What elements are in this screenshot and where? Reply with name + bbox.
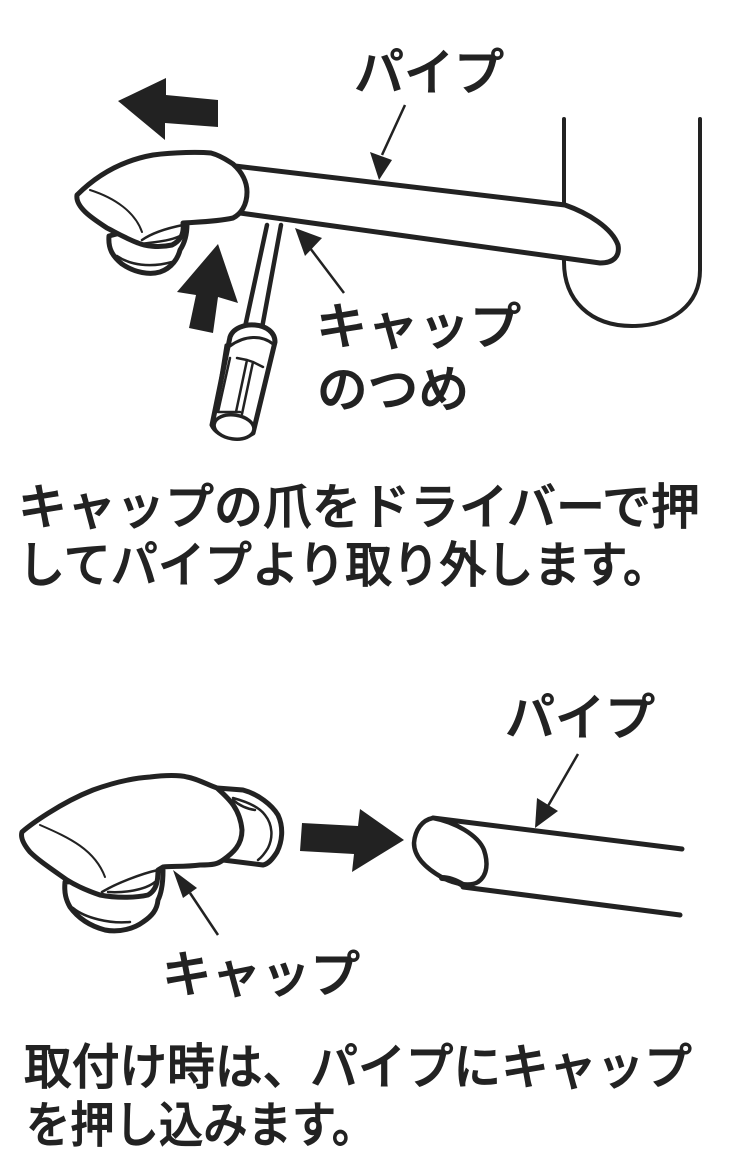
icon: cap	[22, 776, 282, 931]
icon: cap	[77, 152, 247, 273]
arrow: move cap left	[118, 78, 218, 140]
icon: screwdriver	[212, 225, 281, 442]
arrow: pipe leader	[370, 105, 405, 180]
text block: installation instructions	[24, 1041, 692, 1153]
arrow: push cap into pipe	[300, 809, 404, 872]
text block: installation instructions: を押し込みます。	[26, 1099, 376, 1153]
arrow: claw leader	[295, 228, 344, 293]
panel: removal diagram	[77, 45, 700, 442]
arrow: push up	[177, 244, 238, 333]
label: cap claw: のつめ	[317, 362, 469, 418]
label: cap: キャップ	[162, 947, 360, 1003]
arrow: pipe leader	[535, 754, 578, 828]
pipe	[235, 166, 618, 263]
arrow: cap leader	[173, 870, 218, 935]
text block: removal instructions: キャップの爪をドライバーで押	[18, 481, 700, 535]
label: pipe: パイプ	[354, 45, 504, 101]
label: pipe: パイプ	[505, 690, 655, 746]
panel: installation diagram	[22, 690, 682, 1003]
text block: installation instructions: 取付け時は、パイプにキャップ	[24, 1041, 692, 1095]
text block: removal instructions	[18, 481, 700, 593]
label: cap claw	[316, 299, 521, 418]
text block: removal instructions: してパイプより取り外します。	[18, 539, 670, 593]
icon: faucet body outline	[564, 119, 700, 326]
label: cap claw: キャップ	[316, 299, 521, 355]
icon: pipe end	[414, 818, 682, 915]
